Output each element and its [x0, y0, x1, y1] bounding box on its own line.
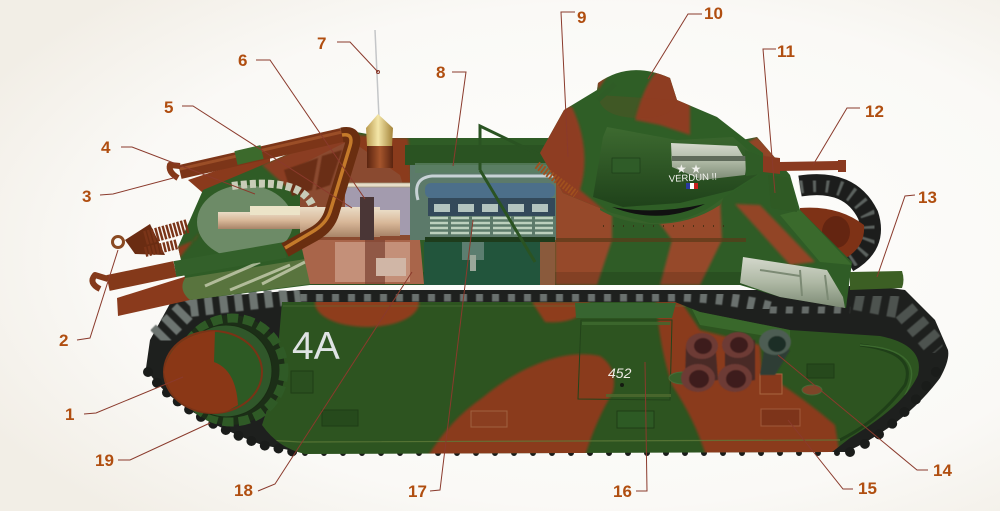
callout 11: 11	[777, 42, 795, 61]
callout 15	[788, 420, 877, 498]
callout 18: 18	[234, 481, 253, 500]
hull hatches and small plates	[291, 364, 834, 428]
callout 15: 15	[858, 479, 877, 498]
callout 14: 14	[933, 461, 952, 480]
callout 13	[877, 188, 937, 277]
rear spring and towing ring	[112, 224, 188, 255]
front idler wheel	[800, 208, 864, 262]
callout 10: 10	[704, 4, 723, 23]
lower hull with camouflage	[262, 302, 919, 454]
callout 13: 13	[918, 188, 937, 207]
callout 6: 6	[238, 51, 247, 70]
callout 4: 4	[101, 138, 111, 157]
callout 6	[238, 51, 365, 199]
chrome front box	[740, 257, 845, 308]
callout 3	[82, 177, 177, 206]
callout 1: 1	[65, 405, 74, 424]
antenna and mast	[366, 30, 393, 168]
callout 19: 19	[95, 451, 114, 470]
cutaway: transmission and fan	[197, 140, 430, 284]
callout 14	[778, 355, 952, 480]
upper hull with camouflage	[170, 125, 860, 310]
front armour neck	[768, 175, 797, 212]
lower hull marking: 452: 452	[608, 365, 632, 381]
callout 7	[317, 34, 380, 74]
upper hull rear wedge	[188, 157, 270, 193]
callout 19	[95, 423, 210, 470]
callout 8	[436, 63, 466, 166]
callout 5: 5	[164, 98, 173, 117]
turret	[534, 70, 846, 224]
tank illustration	[92, 30, 950, 460]
callout 3: 3	[82, 187, 91, 206]
lower track	[146, 285, 948, 453]
callout 8: 8	[436, 63, 445, 82]
callout 12	[813, 102, 884, 165]
track links, upper run	[300, 295, 770, 308]
rear skirt	[117, 272, 300, 316]
gun housing	[671, 143, 747, 180]
callout 17: 17	[408, 482, 427, 501]
ventilation tubes	[681, 329, 791, 392]
callout 18	[234, 272, 412, 500]
lower hull marking: 4A: 4A	[292, 325, 340, 368]
french flag	[686, 183, 698, 189]
front hull tube	[850, 271, 904, 290]
callout 5	[164, 98, 352, 208]
drive sprocket	[164, 315, 285, 425]
turret spring	[537, 165, 576, 194]
callout 1	[65, 377, 183, 424]
callout 2: 2	[59, 331, 68, 350]
callout 12: 12	[865, 102, 884, 121]
cutaway: engine	[405, 145, 556, 285]
mudguard	[182, 258, 312, 300]
upper front track loop	[800, 185, 870, 262]
turret stars: ★ ★	[676, 162, 701, 176]
callout 10	[648, 4, 723, 79]
green engine bay rails	[480, 126, 540, 262]
callout 9: 9	[577, 8, 586, 27]
side door panel	[575, 303, 676, 400]
turret name: VERDUN !!	[669, 171, 717, 185]
callout 4	[101, 138, 255, 194]
callout 11	[763, 42, 795, 193]
main gun	[763, 156, 846, 174]
callout 16: 16	[613, 482, 632, 501]
callout 16	[613, 362, 647, 501]
callout 9	[561, 8, 586, 157]
callout 17	[408, 220, 473, 501]
exhaust pipes	[92, 132, 353, 289]
callout 7: 7	[317, 34, 326, 53]
callout 2	[59, 250, 118, 350]
